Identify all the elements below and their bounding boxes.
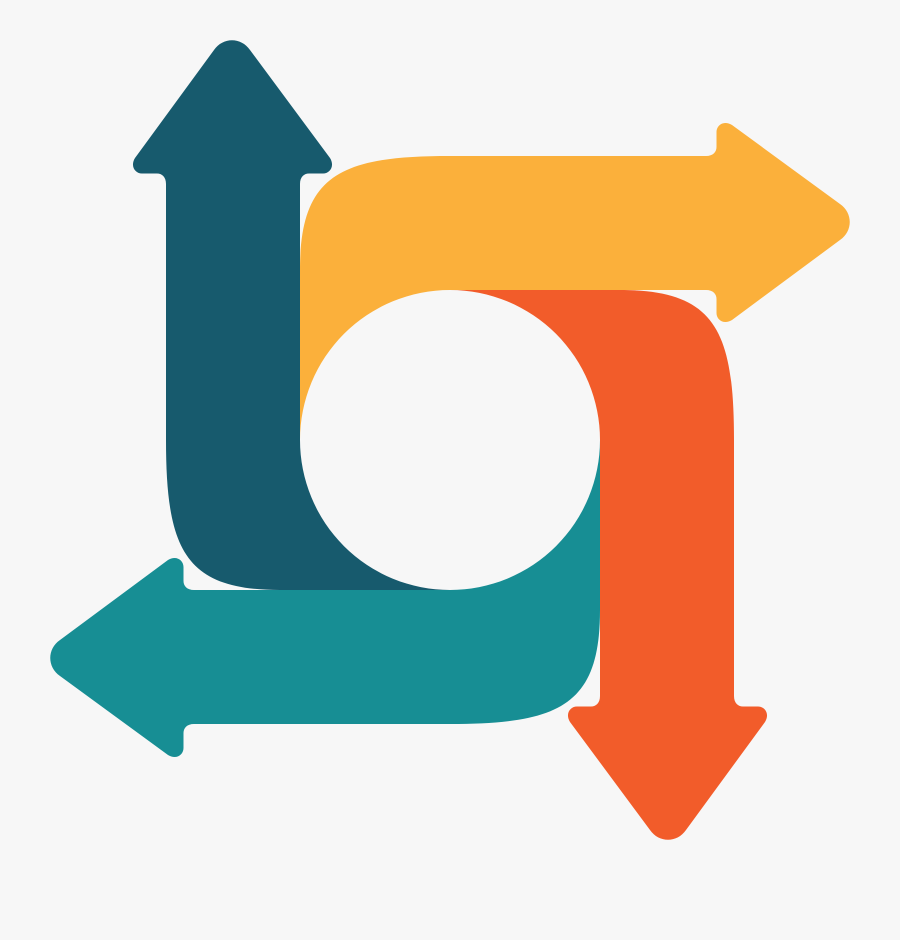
arrow: teal pointing left — [50, 440, 600, 757]
arrow: yellow pointing right — [300, 123, 850, 440]
arrow: orange pointing down — [450, 290, 767, 840]
arrow: dark blue pointing up — [133, 40, 450, 590]
